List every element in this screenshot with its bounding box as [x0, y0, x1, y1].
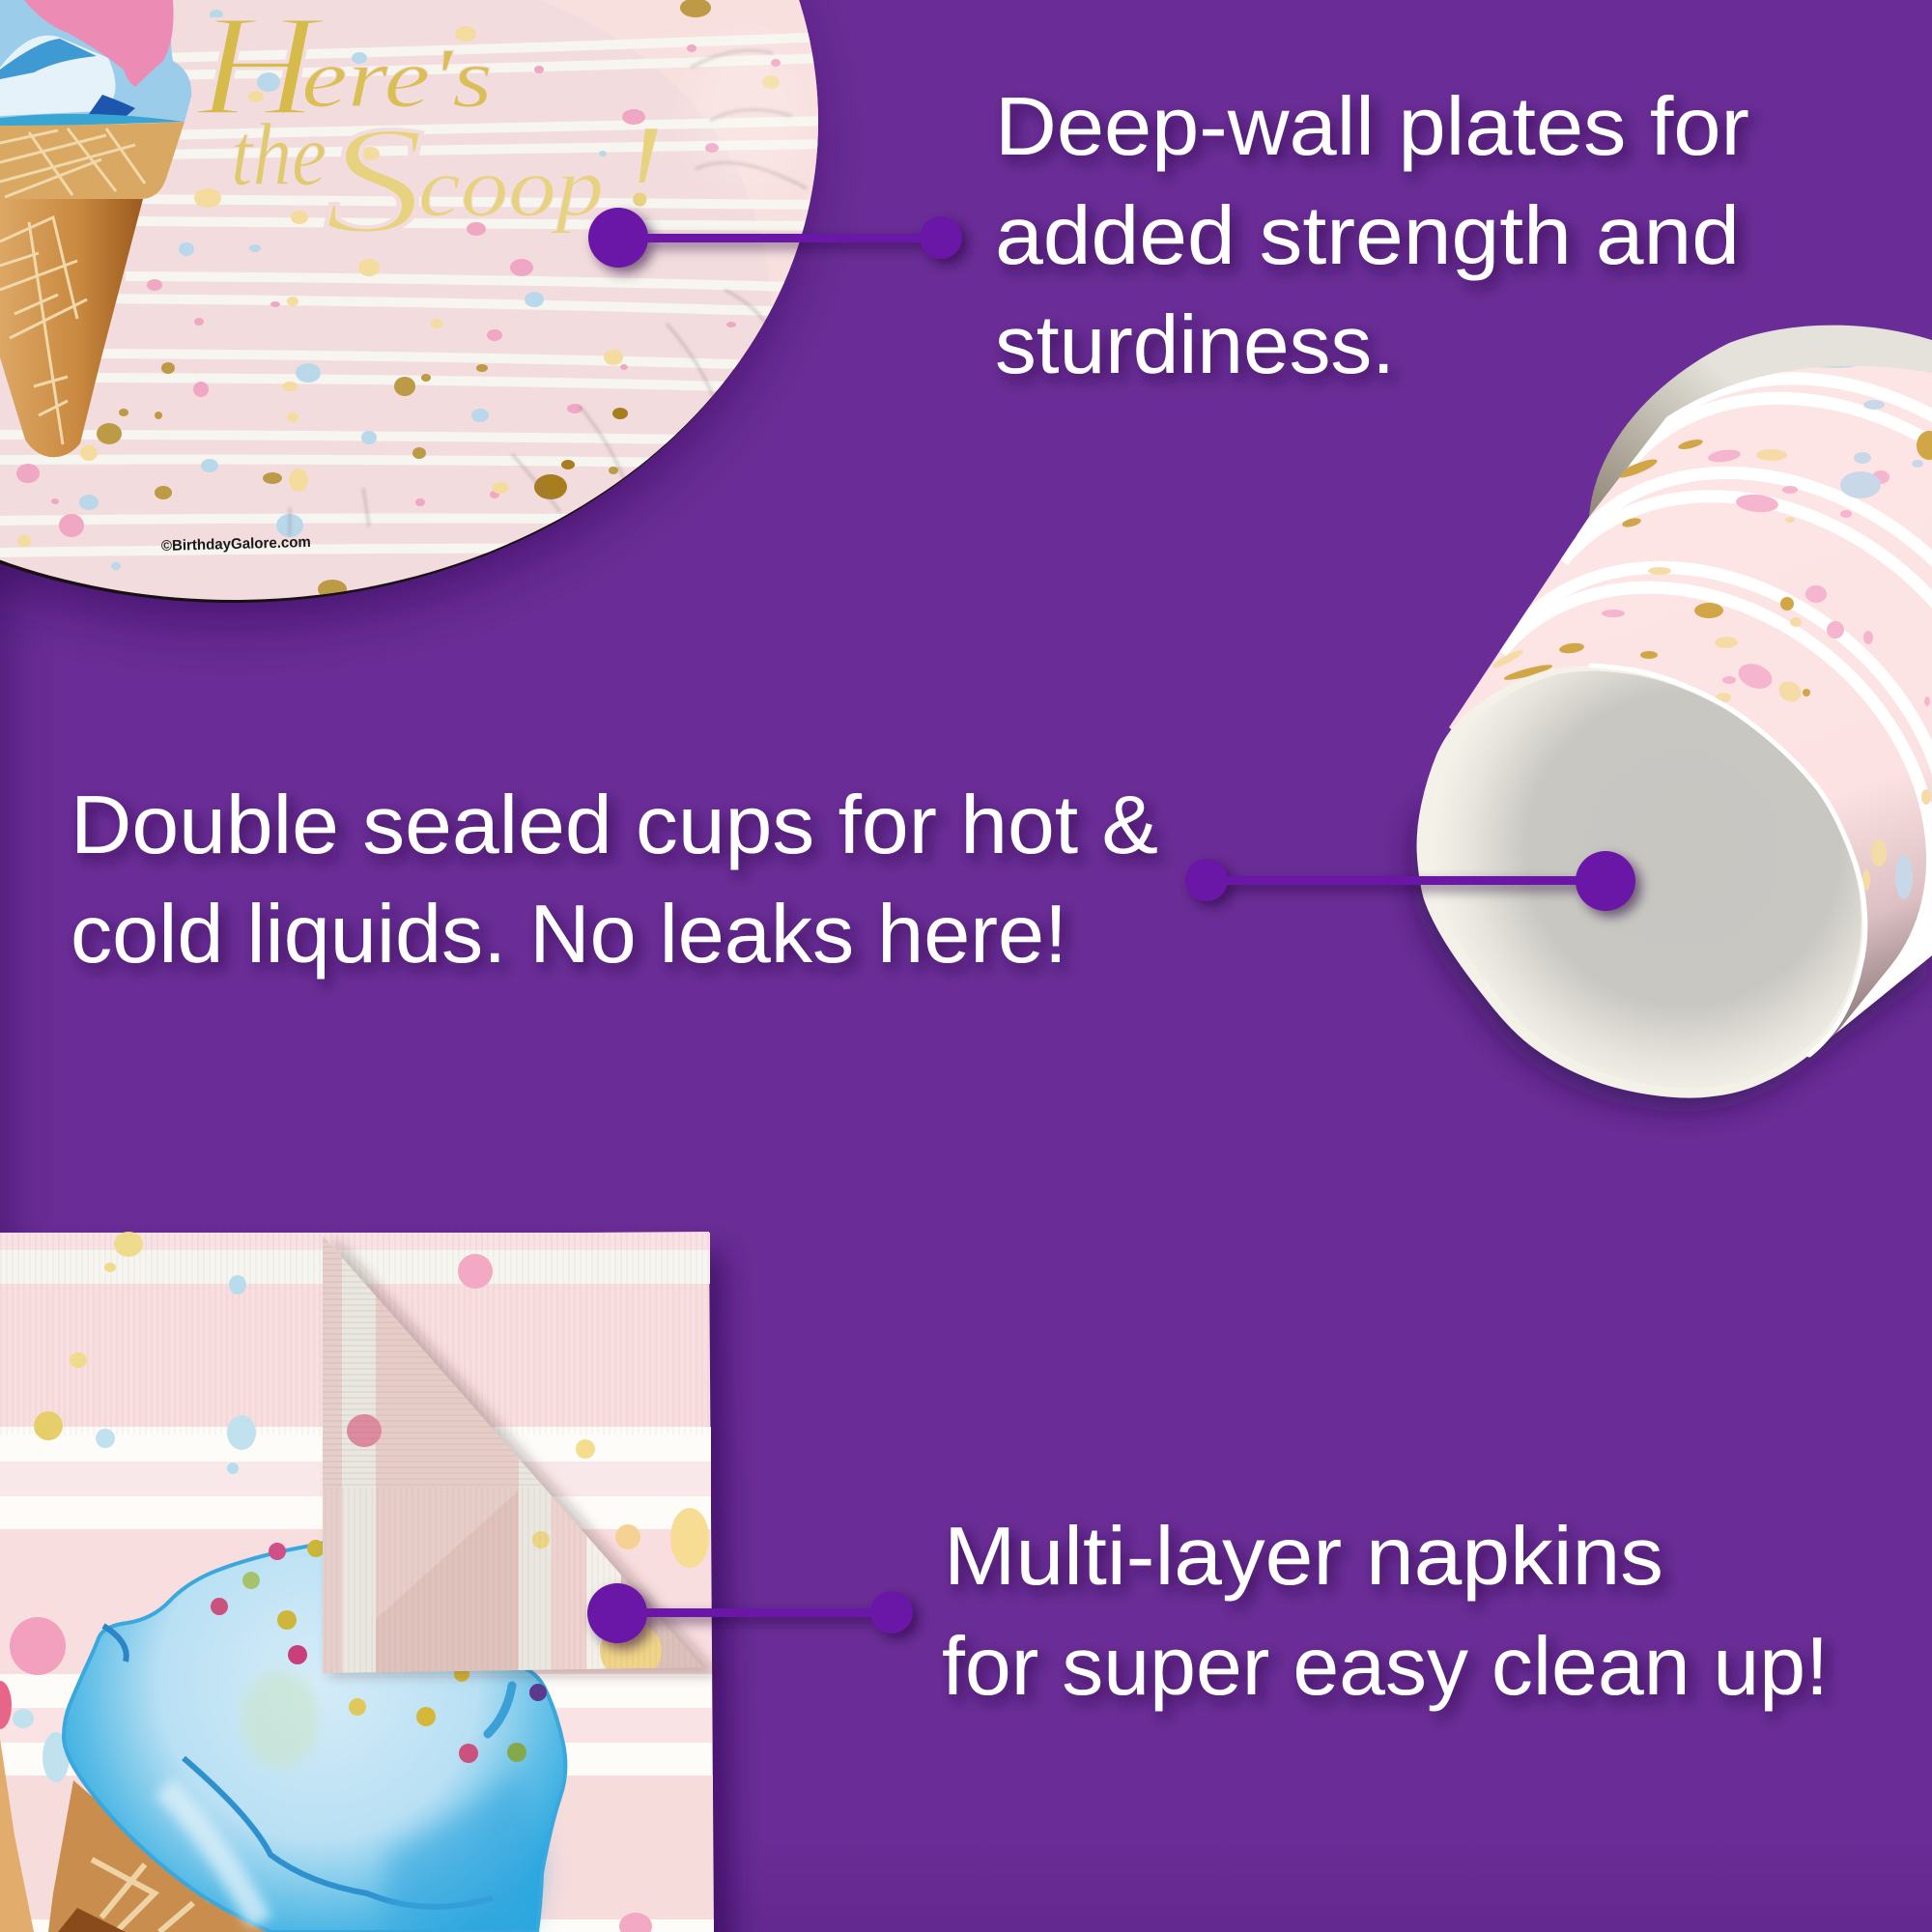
callout: cup marker	[1185, 851, 1635, 911]
confetti: yellow	[17, 26, 780, 547]
confetti: metallic gold	[97, 0, 711, 599]
napkin art: blue ice cream scoop	[64, 1540, 565, 1932]
text: cups	[71, 780, 1158, 980]
plate art: ice cream scoop	[0, 0, 191, 128]
plate slogan: S	[324, 94, 425, 266]
plate creases	[290, 50, 807, 536]
cup base floor	[1429, 671, 1861, 1089]
cup rim	[1589, 326, 1932, 517]
callout: napkin marker	[587, 1583, 913, 1643]
plate slogan: coop	[418, 141, 604, 235]
cup confetti	[1602, 448, 1930, 706]
text: napkins	[942, 1511, 1829, 1713]
text: cups: Double sealed cups for hot &	[71, 780, 1158, 871]
text: plates: sturdiness.	[995, 299, 1395, 391]
cup body	[1449, 365, 1932, 1038]
plate copyright: ©BirthdayGalore.com	[161, 534, 311, 554]
napkin shadow	[0, 1252, 734, 1932]
napkin stripes	[0, 1233, 714, 1932]
napkin confetti	[0, 1232, 709, 1932]
plate highlight	[705, 59, 781, 153]
plate slogan: the	[231, 105, 327, 204]
callout: plate marker	[588, 208, 962, 268]
plate edge	[0, 0, 816, 603]
panel: paper cup	[1400, 325, 1932, 1122]
panel: napkin	[0, 1232, 734, 1932]
text: plates	[995, 81, 1749, 391]
plate art: waffle cone	[0, 122, 185, 457]
text: cups: cold liquids. No leaks here!	[71, 889, 1067, 980]
cup base rim	[1416, 666, 1865, 1098]
plate slogan: !	[624, 101, 663, 230]
text: plates: added strength and	[995, 190, 1740, 282]
confetti: blue	[79, 10, 607, 570]
napkin art: waffle cones	[0, 1739, 270, 1932]
cup base highlight	[1591, 666, 1865, 1055]
plate shadow	[0, 0, 811, 625]
text: napkins: Multi-layer napkins	[944, 1511, 1663, 1603]
panel: paper plate	[0, 0, 869, 625]
plate face	[0, 0, 869, 618]
plate slogan	[195, 0, 663, 266]
napkin fold shadow	[328, 1236, 720, 1676]
plate slogan: ere's	[301, 32, 493, 126]
text: napkins: for super easy clean up!	[942, 1621, 1829, 1713]
text: plates: Deep-wall plates for	[995, 81, 1749, 173]
cup shadow	[1410, 690, 1926, 1112]
confetti: pink	[16, 44, 781, 537]
napkin sheet	[0, 1232, 714, 1932]
napkin fold	[323, 1236, 709, 1681]
